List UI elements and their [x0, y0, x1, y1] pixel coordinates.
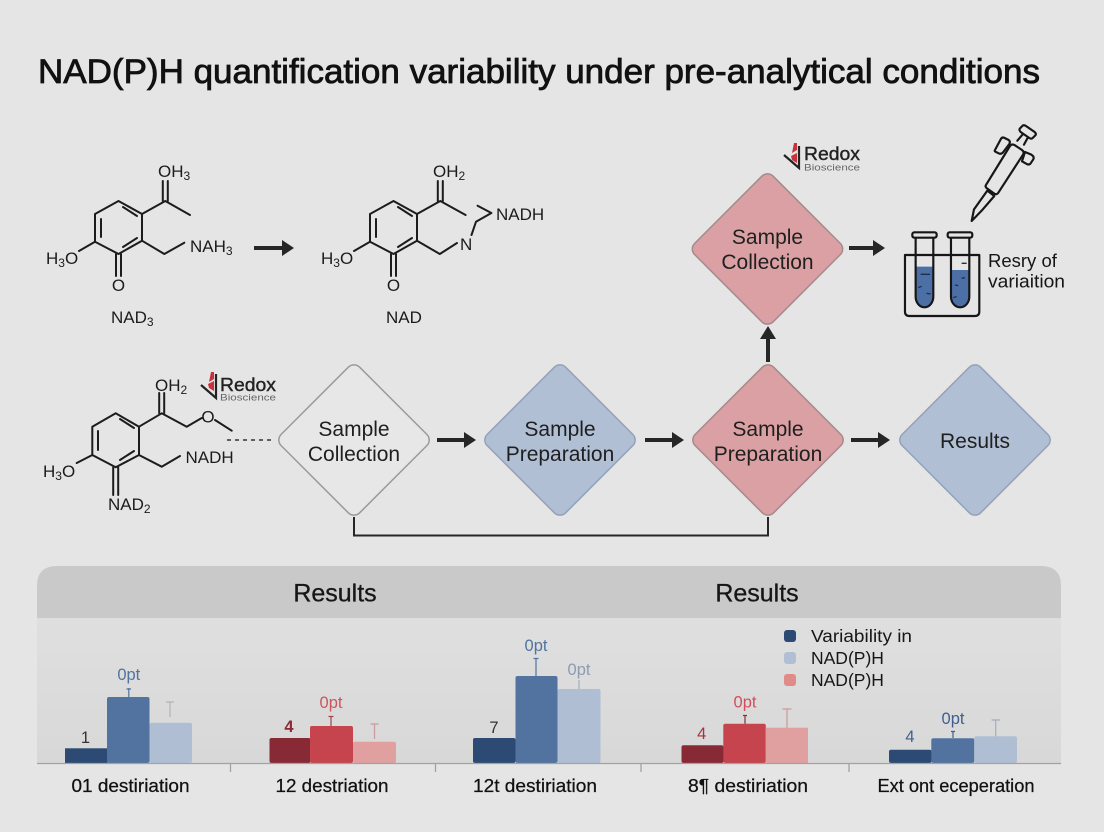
molecule: NAD3: 3 — [226, 244, 233, 258]
diamond: Sample Preparation (pink) — [690, 362, 846, 518]
panel header — [37, 566, 1061, 618]
legend: Variability in — [811, 626, 912, 646]
arrow: up to top diamond — [760, 326, 776, 362]
bracket connector — [354, 517, 768, 536]
diamond: Sample Collection (white): Sample — [318, 418, 390, 441]
bar group 3: 0pt — [525, 637, 548, 655]
bar group 4: 0pt — [734, 694, 757, 712]
panel: results — [37, 566, 1061, 763]
panel body — [37, 618, 1061, 763]
bar group 4: 4 — [697, 725, 706, 743]
axis labels: 8¶ destiriation — [688, 775, 808, 796]
bar group 5: 0pt — [942, 710, 965, 728]
diamond: Sample Preparation (pink): Sample — [732, 418, 804, 441]
bar group 4 — [682, 694, 808, 763]
bar group 1 — [65, 666, 192, 763]
molecule: NAD: 3 — [333, 256, 340, 270]
text: Resry of variaition: Resry of — [988, 250, 1058, 271]
molecule: NAD3: OH — [158, 162, 184, 181]
bar group 5 — [889, 710, 1017, 763]
logo: Redox Bioscience, top — [784, 143, 861, 174]
molecule: NAD3: 3 — [58, 256, 65, 270]
bar group 3: 7 — [489, 719, 499, 737]
heading: Results left: Results — [293, 580, 377, 608]
molecule: NAD3: H — [46, 249, 58, 268]
bar group 5: 4 — [905, 728, 915, 746]
molecule: NAD — [321, 162, 544, 327]
molecule: NAD2: H — [43, 462, 55, 481]
diamond: Sample Preparation (blue) — [482, 362, 638, 518]
molecule: NAD: N — [460, 235, 472, 254]
icon: test tubes in beaker — [905, 232, 979, 316]
logo: Redox Bioscience, top: Redox — [804, 143, 861, 164]
molecule: NAD2: NAD — [108, 495, 144, 514]
arrow: to test tubes — [849, 240, 885, 256]
arrow: molecule conversion — [254, 240, 294, 256]
diamond: Results — [897, 362, 1053, 518]
logo: Redox Bioscience, middle — [201, 372, 277, 404]
molecule: NAD2: 2 — [144, 502, 151, 516]
bar group 2: 4 — [284, 718, 294, 736]
title: NAD(P)H quantification variability under pre-analytical conditions — [38, 53, 1040, 91]
molecule: NAD: O — [340, 249, 353, 268]
molecule: NAD: H — [321, 249, 333, 268]
molecule: NAD: O — [387, 276, 400, 295]
bar group 3 — [473, 637, 600, 763]
legend: NAD(P)H — [811, 670, 884, 690]
arrow: preparation to preparation — [645, 432, 684, 448]
heading: Results right: Results — [715, 580, 799, 608]
bar group 1: 0pt — [117, 666, 141, 684]
legend — [784, 626, 912, 690]
bar group 2 — [270, 694, 396, 763]
molecule: NAD3: NAD — [111, 308, 147, 327]
axis labels: Ext ont eceperation — [878, 775, 1034, 796]
arrow: preparation to results — [851, 432, 890, 448]
molecule: NAD2: NADH — [186, 448, 234, 467]
axis labels: 12t destiriation — [473, 775, 597, 796]
molecule: NAD2: O — [201, 408, 215, 426]
axis labels — [72, 775, 1034, 796]
molecule: NAD: NADH — [496, 205, 544, 224]
axis labels: 01 destiriation — [72, 775, 190, 796]
diamond: Sample Collection (white): Collection — [308, 443, 400, 466]
diamond: Results: Results — [940, 430, 1010, 453]
molecule: NAD3: 3 — [147, 315, 154, 329]
icon: pipette — [972, 125, 1036, 221]
diamond: Sample Preparation (blue): Preparation — [506, 443, 614, 466]
molecule: NAD2: 2 — [180, 383, 188, 397]
bar group 1: 1 — [81, 729, 90, 747]
molecule: NAD2: O — [62, 462, 75, 481]
legend: NAD(P)H — [811, 648, 884, 668]
molecule: NAD: NAD — [386, 308, 422, 327]
bar group 2: 0pt — [320, 694, 343, 712]
arrow: collection to preparation — [437, 432, 476, 448]
molecule: NAD3: NAH — [190, 237, 226, 256]
diamond: Sample Collection (top, pink): Sample — [732, 226, 803, 249]
molecule: NAD3 — [46, 162, 233, 329]
diamond: Sample Collection (top, pink): Collection — [721, 251, 814, 274]
diamond: Sample Preparation (blue): Sample — [524, 418, 596, 441]
logo: Redox Bioscience, middle: Redox — [220, 374, 277, 395]
diamond: Sample Collection (white) — [276, 362, 432, 518]
bar group 3: 0pt — [568, 661, 591, 679]
axis labels: 12 destriation — [276, 775, 388, 796]
logo: Redox Bioscience, middle: Bioscience — [220, 392, 276, 404]
chart axis — [37, 763, 1061, 772]
logo: Redox Bioscience, top: Bioscience — [804, 162, 860, 174]
molecule: NAD3: O — [112, 276, 125, 295]
molecule: NAD: 2 — [458, 169, 466, 183]
molecule: NAD2: OH — [155, 376, 180, 395]
molecule: NAD3: 3 — [184, 169, 190, 183]
diamond: Sample Collection (top, pink) — [689, 171, 846, 327]
molecule: NAD3: O — [65, 249, 78, 268]
text: Resry of variaition: variaition — [988, 270, 1065, 292]
molecule: NAD2 — [43, 376, 271, 516]
diamond: Sample Preparation (pink): Preparation — [714, 443, 822, 466]
molecule: NAD2: 3 — [55, 469, 62, 483]
molecule: NAD: OH — [433, 162, 458, 181]
